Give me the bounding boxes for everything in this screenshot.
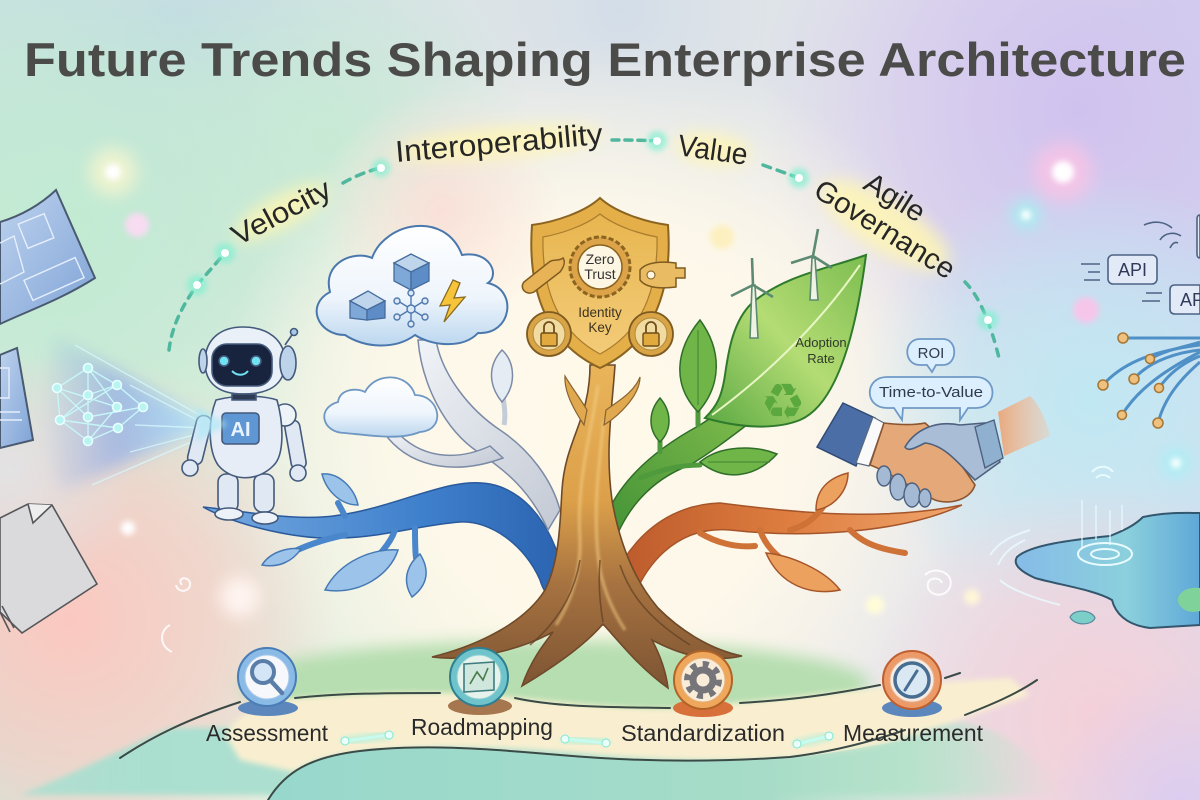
Time-to-Value bubble: Time-to-Value <box>879 384 983 401</box>
magnifier icon <box>252 661 282 693</box>
robot hand <box>905 423 1000 480</box>
map icon <box>464 662 494 692</box>
wifi icon <box>1092 467 1113 478</box>
neural network beam <box>38 335 212 492</box>
shirt cuff <box>856 417 884 466</box>
keyword: Velocity: Velocity <box>226 173 337 252</box>
signal lines <box>1081 222 1181 301</box>
orange branch <box>600 473 962 625</box>
notebook sheet <box>0 504 97 633</box>
label: Identity Key: Identity <box>578 305 622 320</box>
blueprint page two <box>0 348 33 448</box>
label: Adoption Rate: Adoption <box>795 335 847 350</box>
step: Measurement: Measurement <box>843 720 984 746</box>
step: Assessment <box>206 648 329 746</box>
lock coin left <box>527 312 571 356</box>
step connector two <box>561 735 610 747</box>
swirl and moon accents <box>162 571 951 652</box>
step: Measurement <box>843 651 984 746</box>
small cloud <box>324 377 437 437</box>
golden shield <box>522 198 685 368</box>
arc of trend keywords <box>169 118 1000 362</box>
green side leaves <box>640 320 777 478</box>
green branch <box>598 385 760 548</box>
arc nodes <box>187 131 998 330</box>
label: Identity Key <box>578 305 622 335</box>
neural network icon <box>52 364 148 446</box>
API tag two <box>1170 285 1200 314</box>
zero trust seal: Zero <box>586 251 615 267</box>
keyword: Governance: Governance <box>808 174 961 286</box>
API tag one: API <box>1118 260 1147 280</box>
metric bubbles <box>870 339 992 420</box>
gauge icon <box>895 663 929 697</box>
robot fingers <box>877 466 931 507</box>
arms <box>182 404 307 481</box>
API tag three <box>1197 215 1200 258</box>
human arm on right robot cuff <box>998 396 1050 456</box>
orange leaves <box>766 473 848 592</box>
blue leaves <box>262 474 426 597</box>
chest AI panel <box>222 413 259 444</box>
container cube top <box>394 254 429 290</box>
ground with path <box>20 640 1060 800</box>
white cloud branch <box>388 340 560 530</box>
keyword glows <box>228 119 962 286</box>
label: Identity Key: Key <box>588 320 612 335</box>
label: Adoption Rate <box>795 335 847 366</box>
fiber end nodes <box>1098 333 1164 428</box>
lightning bolt <box>440 280 465 322</box>
trunk grain <box>556 385 625 630</box>
beam rays <box>75 345 205 485</box>
beam overlay on chest <box>196 407 228 442</box>
step: Standardization: Standardization <box>621 720 785 746</box>
chest AI panel: AI <box>230 419 250 441</box>
step connector one <box>341 731 393 745</box>
handshake <box>817 396 1050 507</box>
step: Roadmapping: Roadmapping <box>411 714 553 740</box>
lake <box>269 736 1030 800</box>
large green leaf <box>705 229 866 431</box>
step: Assessment: Assessment <box>206 720 329 746</box>
gear icon <box>687 664 719 696</box>
API integration cluster <box>1081 215 1200 428</box>
torso <box>210 396 282 478</box>
process steps <box>206 648 984 748</box>
legacy documents on left <box>0 190 97 633</box>
green hill <box>240 640 870 728</box>
ripples and signal <box>990 500 1132 605</box>
label: Adoption Rate: Rate <box>807 351 835 366</box>
glow orbs <box>89 142 1190 617</box>
wrench icon <box>522 258 564 293</box>
big cloud with icons <box>317 226 507 346</box>
small puddle <box>1070 611 1095 624</box>
robot cuff <box>975 420 1003 468</box>
data pool <box>990 467 1200 628</box>
AI robot <box>182 327 307 524</box>
title: Future Trends Shaping Enterprise Architecture <box>24 33 1186 86</box>
lower teal field <box>20 722 1060 795</box>
road edge lines <box>120 673 1037 800</box>
light beam <box>38 335 212 492</box>
container cube left <box>350 291 385 320</box>
dashed arc connector <box>169 140 1000 362</box>
zero trust seal <box>570 237 630 297</box>
keyword: Agile: Agile <box>858 167 931 229</box>
step: Roadmapping <box>411 648 553 740</box>
blue branch <box>203 474 567 599</box>
step: Standardization <box>621 651 785 746</box>
pale leaf <box>492 350 513 402</box>
cream road <box>225 678 1030 772</box>
fiber cable bundle <box>1103 338 1200 423</box>
key icon <box>640 262 685 288</box>
human hand <box>870 423 975 502</box>
recycling symbol: ♻ <box>761 373 805 431</box>
blueprint sheet <box>0 190 95 324</box>
antenna <box>285 332 294 345</box>
face screen <box>212 344 272 386</box>
lock coin right <box>629 312 673 356</box>
legs and feet <box>215 474 278 524</box>
ROI bubble: ROI <box>918 345 944 362</box>
keyword: Interoperability: Interoperability <box>394 118 604 169</box>
green sprout on pool <box>1178 588 1200 612</box>
wind turbines <box>731 229 832 338</box>
trunk twigs <box>565 376 640 425</box>
keyword: Value: Value <box>676 129 750 172</box>
robot head <box>205 327 285 394</box>
business sleeve <box>817 403 875 466</box>
central trunk with roots <box>432 365 742 688</box>
hub network icon <box>394 290 428 327</box>
step connector three <box>793 732 833 748</box>
API tag one <box>1108 255 1157 284</box>
zero trust seal: Trust <box>584 266 616 282</box>
